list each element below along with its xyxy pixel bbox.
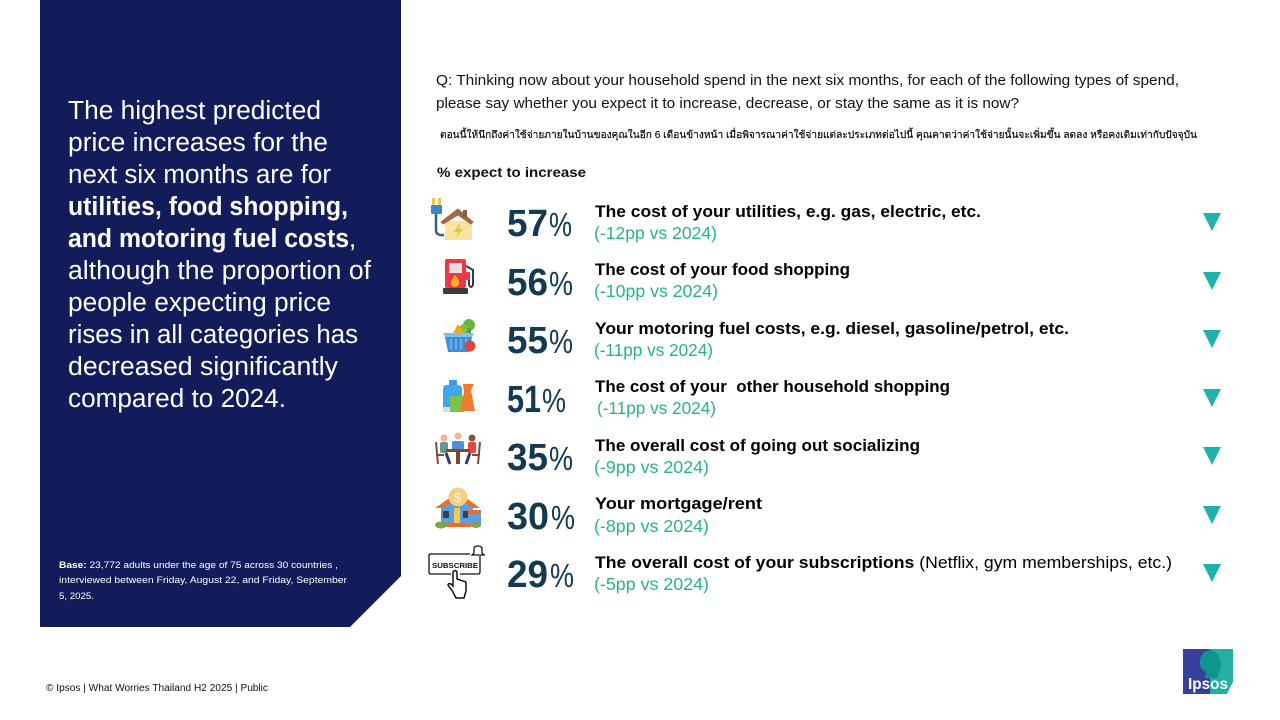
stat: 57% — [507, 203, 572, 245]
subheading: percent expecting increase: % expect to increase — [437, 164, 586, 180]
logo: Ipsos — [1183, 649, 1233, 694]
icon: plug and house — [431, 198, 473, 240]
stat: 29%: % — [550, 557, 574, 594]
icon: cleaning bottles — [443, 380, 475, 412]
label: household shopping: The cost of your other household shopping — [595, 377, 950, 396]
icon: people at table — [436, 432, 480, 464]
footer: copyright: © Ipsos | What Worries Thailand H2 2025 | Public — [46, 683, 268, 694]
change: -8pp: (-8pp vs 2024) — [594, 516, 709, 536]
heading: key finding: price increases for the — [68, 129, 328, 157]
icon: subscribe button: SUBSCRIBE — [432, 561, 478, 570]
row: motoring fuel — [443, 319, 1221, 362]
change: -11pp: (-11pp vs 2024) — [597, 398, 716, 418]
heading: key finding: next six months are for — [68, 161, 332, 189]
text: Thai translation of question: ตอนนี้ให้นึกถึงค่าใช้จ่ายภายในบ้านของคุณในอีก 6 เดือนข้างหน้า เมื่อพิจารณาค่าใช้จ่ายแต่ละประเภทต่อไปนี้ คุณคาดว่าค่าใช้จ่ายนั้นจะเพิ่มขึ้น ลดลง หรือคงเดิมเท่ากับปัจจุบัน — [440, 127, 1197, 141]
stat: 56%: 56 — [507, 262, 548, 304]
text: survey question: please say whether you expect it to increase, decrease, or stay the same as it is now? — [436, 96, 1019, 112]
panel: navy summary — [40, 0, 401, 627]
icon: grocery basket — [443, 319, 476, 352]
icon: down arrow — [1203, 564, 1221, 582]
row: other household shopping — [443, 377, 1221, 421]
stat: 35%: 35 — [507, 437, 548, 479]
text: base note — [59, 560, 347, 602]
icon: house with coin — [435, 488, 481, 528]
change: -10pp: (-10pp vs 2024) — [594, 281, 718, 301]
text: survey question — [436, 73, 1179, 112]
icon: down arrow — [1203, 213, 1221, 231]
heading: key finding: and motoring fuel costs — [68, 225, 349, 253]
icon: down arrow — [1203, 330, 1221, 348]
stat: 55%: 55 — [507, 320, 548, 362]
text: base note: interviewed between Friday, August 22, and Friday, September — [59, 575, 347, 586]
icon: down arrow — [1203, 447, 1221, 465]
stat: 56% — [507, 262, 573, 304]
icon: fuel pump — [443, 259, 473, 294]
stat: 29% — [507, 554, 574, 596]
heading: key finding: people expecting price — [68, 289, 331, 317]
stat: 29%: 29 — [507, 554, 548, 596]
logo: Ipsos: Ipsos — [1188, 676, 1228, 693]
icon: house with coin: $ — [454, 490, 462, 505]
change: -11pp: (-11pp vs 2024) — [594, 340, 713, 360]
row: mortgage — [435, 488, 1221, 538]
stat: 51%: 51 — [507, 379, 541, 421]
heading: key finding: rises in all categories has — [68, 321, 358, 349]
heading: key finding: , — [349, 225, 356, 253]
text: survey question: Q: Thinking now about your household spend in the next six months, for each of the following types of spend, — [436, 73, 1179, 89]
heading: key finding: The highest predicted — [68, 97, 321, 125]
stat: 55% — [507, 320, 573, 362]
icon: down arrow — [1203, 272, 1221, 290]
row: going out — [436, 432, 1221, 479]
stat: 51%: % — [542, 382, 566, 419]
stat: 30% — [507, 496, 575, 538]
label: subscriptions: The overall cost of your subscriptions (Netflix, gym memberships, etc.) — [595, 553, 1172, 572]
text: base note: 5, 2025. — [59, 591, 94, 602]
stat: 30%: % — [551, 499, 575, 536]
label: mortgage: Your mortgage/rent — [595, 494, 762, 513]
label: socializing: The overall cost of going out socializing — [595, 436, 920, 455]
label: utilities: The cost of your utilities, e.g. gas, electric, etc. — [595, 202, 981, 221]
icon: subscribe button — [429, 546, 484, 598]
heading: key finding: decreased significantly — [68, 353, 338, 381]
stat: 56%: % — [549, 265, 573, 302]
change: -12pp: (-12pp vs 2024) — [594, 223, 717, 243]
change: -9pp: (-9pp vs 2024) — [594, 457, 709, 477]
stat: 57%: 57 — [507, 203, 548, 245]
text: base note: Base: 23,772 adults under the age of 75 across 30 countries , — [59, 560, 338, 571]
heading: key finding: utilities, food shopping, — [68, 193, 348, 221]
heading: key finding: although the proportion of — [68, 257, 372, 285]
stat: 35% — [507, 437, 573, 479]
stat: 55%: % — [549, 323, 573, 360]
stat: 30%: 30 — [507, 496, 549, 538]
heading: key finding: compared to 2024. — [68, 385, 286, 413]
icon: down arrow — [1203, 506, 1221, 524]
icon: down arrow — [1203, 389, 1221, 407]
change: -5pp: (-5pp vs 2024) — [594, 574, 709, 594]
stat: 57%: % — [549, 206, 572, 243]
row: subscriptions — [429, 546, 1221, 598]
row: utilities — [431, 198, 1221, 245]
label: food shopping: The cost of your food shopping — [595, 260, 850, 279]
label: motoring fuel: Your motoring fuel costs, e.g. diesel, gasoline/petrol, etc. — [595, 319, 1069, 338]
heading: key finding — [68, 97, 372, 413]
row: food shopping — [443, 259, 1221, 304]
stat: 35%: % — [549, 440, 573, 477]
